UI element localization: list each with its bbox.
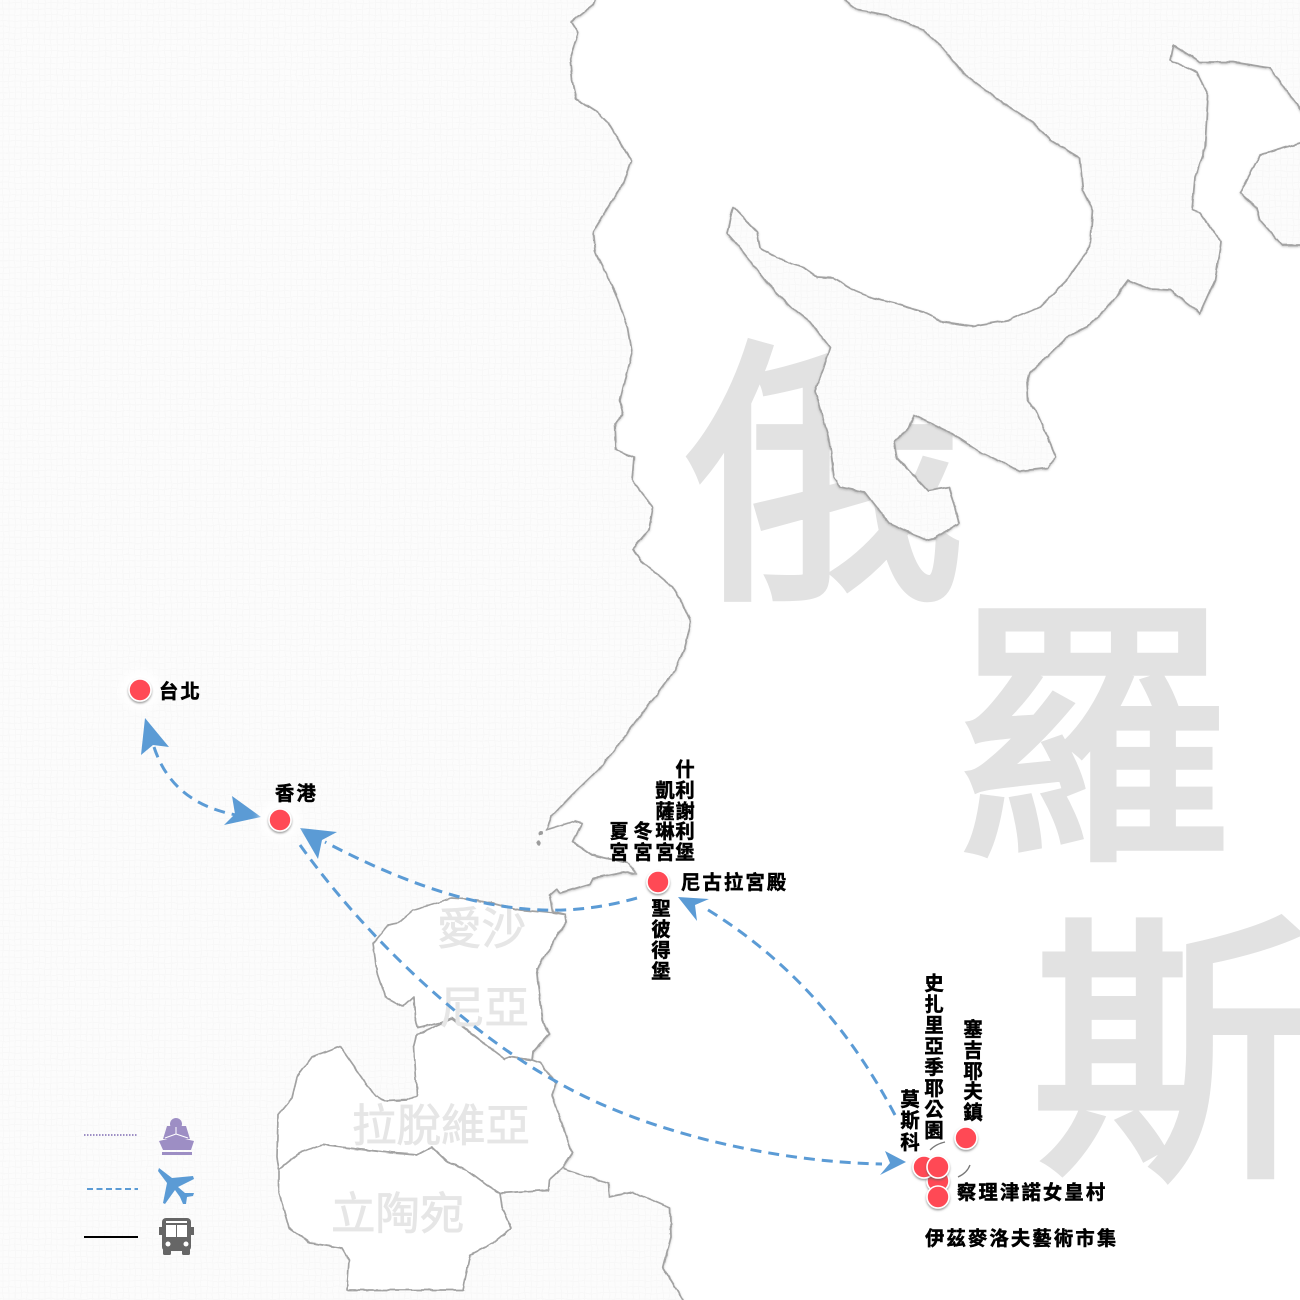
label: 察理津諾女皇村: 察理津諾女皇村: [957, 1181, 1107, 1204]
icon: bus: [159, 1218, 194, 1255]
west sea and Belarus region: [0, 0, 691, 1300]
pin: Taipei: [120, 670, 160, 710]
label: 伊茲麥洛夫藝術市集: 伊茲麥洛夫藝術市集: [925, 1227, 1118, 1250]
label: 聖彼得堡: 得: [651, 940, 671, 962]
label: 莫斯科: 科: [900, 1132, 920, 1154]
label: 尼古拉宮殿: 尼古拉宮殿: [681, 871, 788, 894]
label: 凱薩琳宮: 凱: [655, 780, 675, 802]
label: 史扎里亞季耶公園: 季: [924, 1057, 944, 1079]
label: 史扎里亞季耶公園: 扎: [924, 994, 944, 1016]
label: 台北: 台北: [159, 680, 202, 703]
Estonia label: [437, 905, 529, 1033]
label: 凱薩琳宮: 宮: [655, 841, 675, 864]
label: 塞吉耶夫鎮: 塞: [963, 1018, 983, 1041]
label: 塞吉耶夫鎮: 吉: [963, 1040, 983, 1062]
legend: [84, 1118, 194, 1255]
icon: plane: [158, 1168, 194, 1204]
large title: 俄羅斯: [685, 324, 1300, 1213]
route: St Petersburg to Hong Kong flight: [300, 828, 637, 910]
large title: 俄羅斯: 俄: [685, 324, 965, 636]
route: Taipei and Hong Kong flight: [141, 718, 261, 825]
leader lines: [930, 1142, 970, 1177]
label: 塞吉耶夫鎮: 夫: [963, 1081, 983, 1103]
label: 史扎里亞季耶公園: 史: [924, 973, 944, 995]
label: 什利謝利堡: 什: [675, 759, 695, 781]
legend: bus line: [84, 1236, 138, 1238]
islands near the gulf: [537, 831, 543, 845]
east water: [1240, 142, 1300, 245]
Lithuania label: 立陶宛: [331, 1190, 465, 1239]
Estonia label: 愛沙: [437, 905, 526, 954]
label: 夏宮: 夏: [609, 822, 629, 843]
pin: St Petersburg: [638, 862, 678, 902]
pin: Hong Kong: [260, 800, 300, 840]
legend: flight line: [87, 1188, 138, 1190]
label: 史扎里亞季耶公園: 亞: [924, 1037, 944, 1058]
label: 莫斯科: 斯: [900, 1110, 920, 1132]
label: 香港: 香港: [275, 783, 318, 805]
label: 凱薩琳宮: 薩: [655, 801, 675, 823]
label: 史扎里亞季耶公園: 里: [924, 1015, 944, 1037]
Estonia label: 尼亞: [440, 984, 529, 1033]
label: 塞吉耶夫鎮: 鎮: [963, 1101, 983, 1124]
label: 聖彼得堡: 聖: [651, 899, 671, 920]
label: 什利謝利堡: 利: [675, 780, 695, 802]
label: 聖彼得堡: 堡: [651, 961, 671, 983]
Estonia: [373, 898, 566, 1060]
label: 聖彼得堡: 彼: [651, 919, 671, 941]
country labels: [331, 905, 530, 1239]
Latvia label: 拉脫維亞: [352, 1102, 530, 1151]
label: 什利謝利堡: 堡: [675, 842, 695, 864]
Latvia: [277, 1019, 572, 1193]
label: 史扎里亞季耶公園: 耶: [924, 1078, 944, 1100]
route: Hong Kong to Moscow flight: [300, 845, 906, 1175]
route: Moscow to St Petersburg flight: [678, 897, 895, 1115]
label: 夏宮: 宮: [609, 841, 629, 864]
label: 史扎里亞季耶公園: 公: [924, 1099, 944, 1121]
label: 冬宮: 宮: [633, 841, 653, 864]
legend: ship line: [84, 1134, 138, 1136]
Lithuania: [279, 1145, 511, 1290]
label: 莫斯科: 莫: [900, 1089, 920, 1111]
label: 塞吉耶夫鎮: 耶: [963, 1061, 983, 1083]
label: 冬宮: 冬: [633, 821, 653, 843]
large title: 俄羅斯: 羅: [952, 584, 1232, 896]
label: 什利謝利堡: 利: [675, 821, 695, 843]
label: 什利謝利堡: 謝: [675, 801, 695, 823]
icon: ship: [159, 1118, 194, 1155]
north gulf and inland water: [727, 0, 1300, 540]
label: 凱薩琳宮: 琳: [655, 821, 675, 843]
pins: Moscow area: [913, 1127, 977, 1208]
label: 史扎里亞季耶公園: 園: [924, 1120, 944, 1142]
